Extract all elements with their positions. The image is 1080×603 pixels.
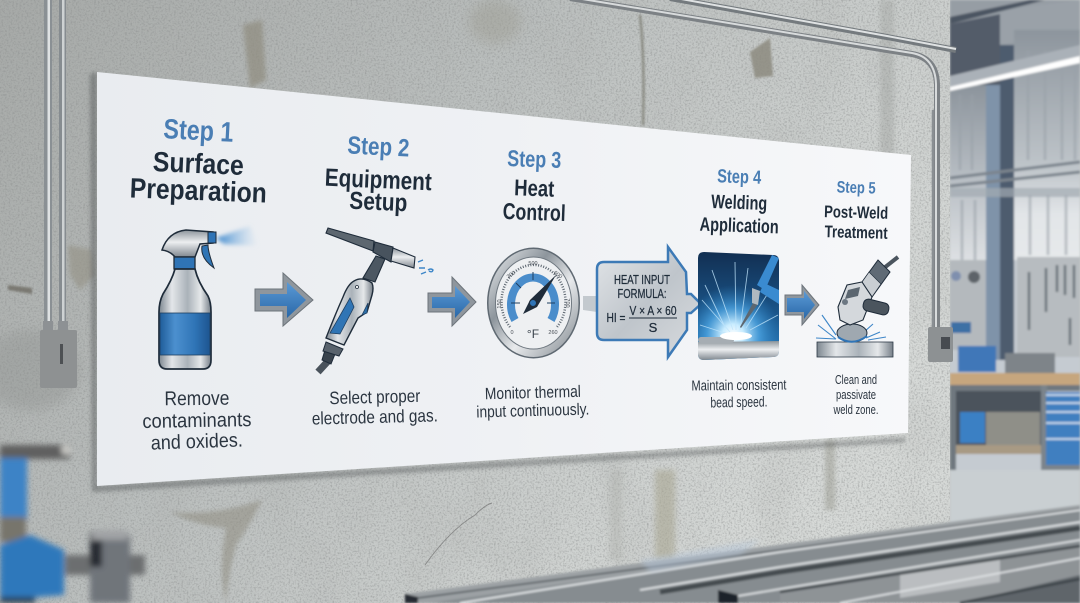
step 1 description: Remove — [164, 388, 230, 410]
junction box: right — [928, 327, 953, 362]
icon: temperature gauge: °F — [527, 327, 539, 341]
sign shadow — [90, 72, 905, 492]
step 3 heading: Heat — [514, 174, 555, 202]
icon: spray bottle — [159, 226, 258, 369]
step 4 heading: Step 4 — [717, 166, 762, 189]
workshop background — [950, 0, 1080, 603]
icon: welding torch — [318, 228, 433, 372]
step 1 heading: Step 1 — [163, 113, 234, 148]
step 5 heading — [824, 178, 888, 243]
icon: temperature gauge — [487, 248, 580, 358]
step 5 heading: Step 5 — [836, 178, 876, 198]
icon: temperature gauge: 150 — [497, 299, 503, 309]
junction box: left — [40, 321, 77, 388]
conduit pipes: top right — [570, 0, 956, 328]
formula arrow — [583, 247, 701, 357]
step 3 description: Monitor thermal — [485, 383, 581, 403]
step 2 description: electrode and gas. — [312, 405, 438, 429]
step 2 heading: Equipment — [324, 164, 433, 196]
formula arrow: V × A × 60 — [630, 303, 676, 318]
step 2 description — [312, 386, 438, 429]
icon: temperature gauge: 300 — [506, 270, 517, 280]
step 5 description: passivate — [836, 388, 876, 402]
step 5 description: weld zone. — [833, 403, 878, 417]
step 1 heading — [129, 113, 267, 209]
step 2 heading: Setup — [349, 187, 408, 217]
icon: temperature gauge: 600 — [552, 270, 563, 280]
step 5 heading: Post-Weld — [824, 202, 888, 223]
step 4 heading — [699, 166, 779, 238]
arrow 1 — [255, 273, 313, 326]
arrow 3 — [785, 285, 819, 325]
foreground vise — [0, 445, 145, 603]
step 3 heading: Control — [502, 198, 566, 226]
formula arrow: HEAT INPUT — [614, 272, 670, 287]
step 4 description: Maintain consistent — [691, 378, 787, 394]
step 1 description: and oxides. — [150, 429, 243, 455]
icon: temperature gauge: 0 — [510, 330, 514, 336]
icon: temperature gauge: 500 — [528, 261, 538, 267]
formula arrow: HI = — [606, 310, 626, 325]
conduit pipes: left — [44, 0, 66, 325]
step 5 heading: Treatment — [824, 222, 888, 243]
step 2 heading: Step 2 — [347, 131, 410, 163]
step 3 heading: Step 3 — [507, 145, 562, 173]
arrow 2 — [428, 277, 476, 326]
step 4 heading: Welding — [711, 191, 768, 215]
step 2 description: Select proper — [329, 386, 421, 408]
step 4 description: bead speed. — [710, 395, 768, 411]
step 3 description — [476, 383, 590, 421]
icon: temperature gauge: 700 — [564, 298, 570, 308]
step 5 description — [833, 373, 878, 417]
welding scene image — [698, 252, 779, 360]
step 5 description: Clean and — [835, 373, 877, 387]
icon: temperature gauge: 260 — [548, 330, 558, 336]
step 3 description: input continuously. — [476, 401, 590, 421]
step 1 description — [142, 388, 252, 455]
icon: angle grinder — [816, 257, 898, 357]
formula arrow: S — [649, 320, 658, 335]
step 1 description: contaminants — [142, 409, 252, 433]
foreground steel bars — [405, 505, 1080, 603]
formula arrow: FORMULA: — [618, 286, 666, 301]
step 4 description — [691, 378, 787, 411]
step 4 heading: Application — [699, 214, 779, 238]
sign panel — [97, 72, 911, 486]
step 2 heading — [324, 131, 433, 217]
step 1 heading: Surface — [152, 146, 245, 181]
step 1 heading: Preparation — [129, 172, 267, 209]
step 3 heading — [502, 145, 566, 226]
